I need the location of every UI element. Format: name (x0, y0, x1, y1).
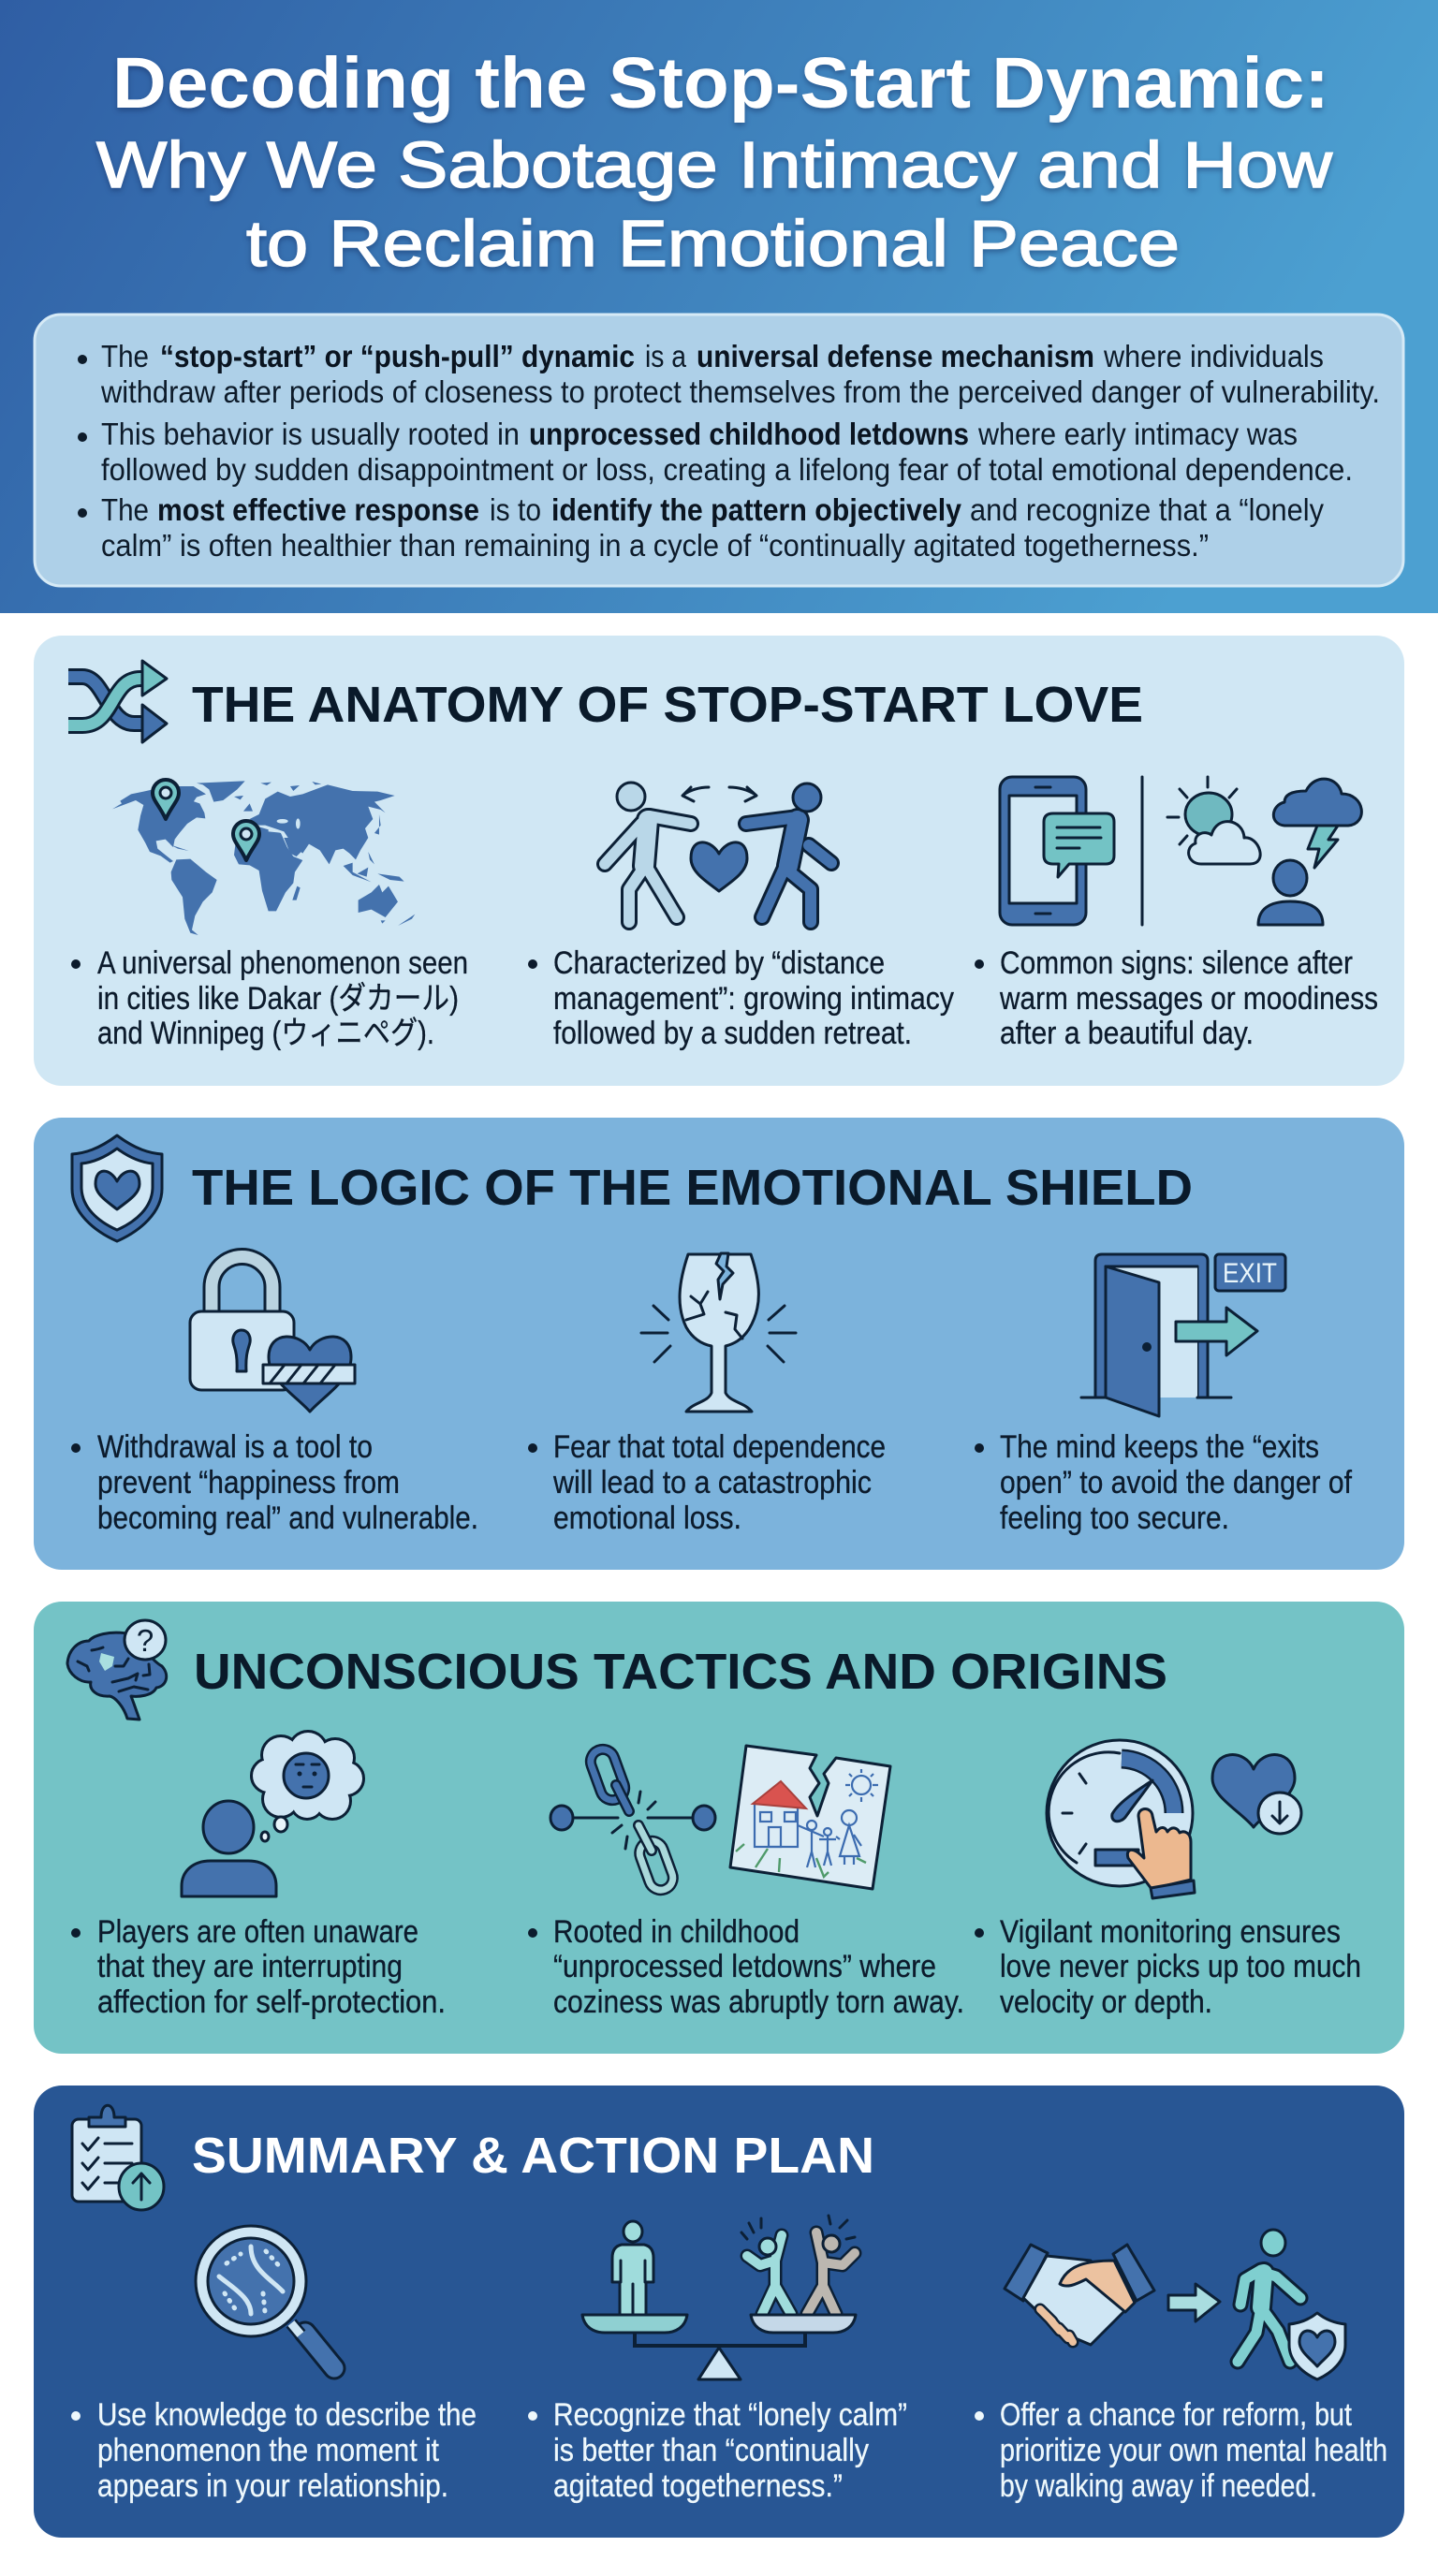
text: column 2 (528, 2397, 907, 2504)
intro bullet 1: “stop-start” or “push-pull” dynamic (160, 339, 635, 373)
text: column 2: agitated togetherness.” (553, 2468, 843, 2504)
intro bullet 3: is to (490, 492, 541, 527)
icon: phone and mood weather (1000, 777, 1361, 925)
agitated pair (741, 2216, 855, 2314)
heading: SUMMARY & ACTION PLAN (192, 2128, 874, 2184)
intro bullet 2: where early intimacy was (977, 417, 1298, 451)
title (96, 43, 1332, 280)
text: column 2: emotional loss. (553, 1500, 741, 1536)
text: column 3 (975, 1429, 1352, 1536)
title: Decoding the Stop-Start Dynamic: (112, 43, 1329, 124)
panel: the anatomy of stop-start love (34, 636, 1404, 1086)
icon: open exit door (1081, 1254, 1285, 1416)
text: column 2 (528, 945, 954, 1051)
heading: THE LOGIC OF THE EMOTIONAL SHIELD (192, 1160, 1193, 1216)
icon: broken chain (550, 1746, 715, 1894)
text: column 1: appears in your relationship. (97, 2468, 448, 2504)
text: column 3 (975, 2397, 1387, 2504)
icon: world map with pins (112, 780, 415, 935)
text: column 2: “unprocessed letdowns” where (553, 1949, 936, 1984)
intro bullet 1: is a (645, 339, 687, 373)
icon: person with thought cloud (182, 1733, 362, 1896)
text: column 1: phenomenon the moment it (97, 2433, 439, 2468)
text: column 1: and Winnipeg (ウィニペグ). (97, 1016, 434, 1051)
icon: open exit door: EXIT (1223, 1258, 1277, 1289)
text: column 1: in cities like Dakar (ダカール) (97, 981, 459, 1017)
text: column 1: A universal phenomenon seen (97, 945, 468, 981)
text: column 3: after a beautiful day. (1000, 1016, 1254, 1051)
icon: padlock and bandaged heart (190, 1256, 355, 1412)
text: column 2: coziness was abruptly torn away. (553, 1984, 964, 2020)
intro bullet 3: most effective response (157, 492, 479, 527)
icon: torn childhood drawing (730, 1746, 890, 1889)
intro bullet 2: followed by sudden disappointment or loss, creating a lifelong fear of total emotional dependence. (101, 452, 1353, 487)
text: column 3: The mind keeps the “exits (1000, 1429, 1319, 1465)
panel: the logic of the emotional shield (34, 1118, 1404, 1570)
intro bullet 3: and recognize that a “lonely (970, 492, 1324, 527)
text: column 1 (71, 2397, 477, 2504)
text: column 3: Offer a chance for reform, but (1000, 2397, 1352, 2433)
heading: UNCONSCIOUS TACTICS AND ORIGINS (194, 1644, 1167, 1700)
intro bullet 1: universal defense mechanism (697, 339, 1094, 373)
text: column 3 (975, 1914, 1361, 2020)
intro summary box (35, 315, 1403, 586)
title: Why We Sabotage Intimacy and How (96, 128, 1332, 201)
intro bullet 3: identify the pattern objectively (551, 492, 962, 527)
icon: handshake, arrow and walking figure with shield (1005, 2230, 1345, 2379)
intro bullet 3: calm” is often healthier than remaining in a cycle of “continually agitated togetherness.” (101, 528, 1209, 563)
text: column 2: Rooted in childhood (553, 1914, 800, 1950)
text: column 2 (528, 1429, 886, 1536)
text: column 3: by walking away if needed. (1000, 2468, 1317, 2504)
text: column 3: Vigilant monitoring ensures (1000, 1914, 1341, 1950)
text: column 1 (71, 945, 468, 1051)
text: column 2 (528, 1914, 964, 2020)
text: column 3: open” to avoid the danger of (1000, 1465, 1352, 1500)
text: column 1: affection for self-protection. (97, 1984, 446, 2020)
lonely figure (612, 2221, 653, 2315)
intro bullet 1: withdraw after periods of closeness to protect themselves from the perceived danger of vulnerability. (100, 374, 1380, 409)
text: column 1: Withdrawal is a tool to (97, 1429, 373, 1465)
icon: balance scale, lonely calm vs agitated pair (582, 2216, 856, 2379)
handshake (1005, 2245, 1154, 2345)
small shield (1289, 2313, 1345, 2379)
text: column 2: is better than “continually (553, 2433, 869, 2468)
text: column 2: Fear that total dependence (553, 1429, 886, 1465)
text: column 3: love never picks up too much (1000, 1949, 1361, 1984)
text: column 2: management”: growing intimacy (553, 981, 954, 1017)
text: column 1: Players are often unaware (97, 1914, 418, 1950)
text: column 2: Recognize that “lonely calm” (553, 2397, 907, 2433)
icon: shield with heart (72, 1135, 162, 1241)
icon: push-pull figures with heart (605, 783, 831, 922)
text: column 1: becoming real” and vulnerable. (97, 1500, 478, 1536)
text: column 1: that they are interrupting (97, 1949, 403, 1984)
title: to Reclaim Emotional Peace (246, 207, 1180, 280)
icon: magnifying glass (196, 2226, 334, 2368)
text: column 3: feeling too secure. (1000, 1500, 1229, 1536)
intro bullet 1: where individuals (1103, 339, 1324, 373)
intro bullet 1 (78, 339, 1380, 409)
text: column 2: will lead to a catastrophic (552, 1465, 872, 1500)
header band (0, 0, 1438, 613)
icon: shuffle arrows (68, 661, 167, 742)
intro bullet 2 (78, 417, 1353, 487)
panel: unconscious tactics and origins (34, 1602, 1404, 2054)
text: column 3 (975, 945, 1378, 1051)
text: column 1: prevent “happiness from (97, 1465, 400, 1500)
text: column 1 (71, 1914, 446, 2020)
icon: brain with question mark: ? (137, 1623, 154, 1658)
icon: checklist clipboard (72, 2105, 164, 2210)
walking figure (1238, 2230, 1300, 2362)
heading: THE ANATOMY OF STOP-START LOVE (192, 677, 1143, 733)
intro bullet 3 (78, 492, 1324, 563)
intro bullet 2: This behavior is usually rooted in (101, 417, 520, 451)
text: column 2: Characterized by “distance (553, 945, 885, 981)
intro bullet 3: The (101, 492, 149, 527)
text: column 1: Use knowledge to describe the (97, 2397, 477, 2433)
panel: summary and action plan (34, 2086, 1404, 2538)
icon: brain with question mark (67, 1620, 167, 1720)
intro bullet 2: unprocessed childhood letdowns (529, 417, 969, 451)
text: column 1 (71, 1429, 478, 1536)
icon: speed gauge with hand and lowered heart (1047, 1740, 1301, 1898)
text: column 2: followed by a sudden retreat. (553, 1016, 912, 1051)
text: column 3: Common signs: silence after (1000, 945, 1353, 981)
icon: broken wine glass (641, 1253, 796, 1412)
text: column 3: velocity or depth. (1000, 1984, 1212, 2020)
intro bullet 1: The (101, 339, 149, 373)
text: column 3: warm messages or moodiness (999, 981, 1378, 1017)
